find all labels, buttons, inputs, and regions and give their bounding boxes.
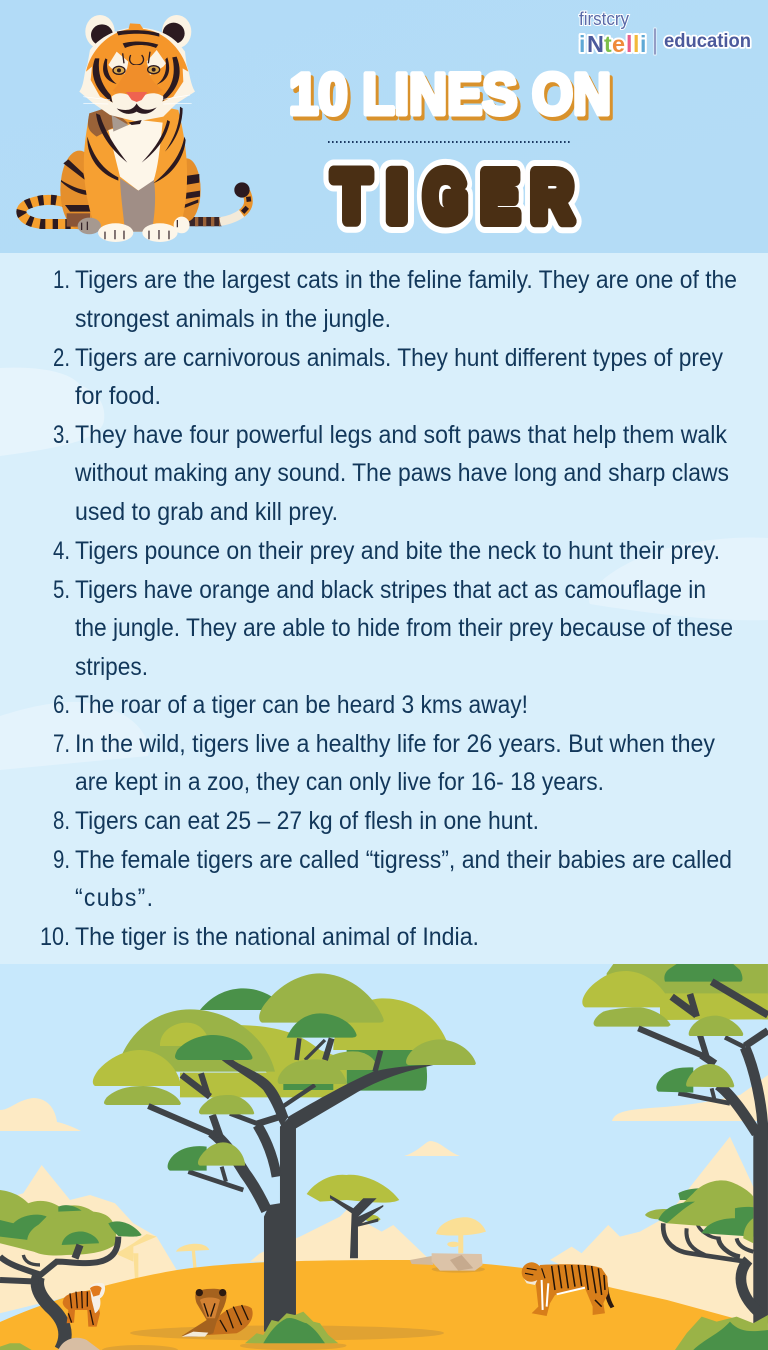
logo: intelli: l [633,31,639,57]
logo: intelli: e [612,31,625,57]
left tree foliage back [0,1190,115,1253]
title: tiger: I [387,158,407,237]
logo divider [654,28,656,55]
text: fact 1 [53,266,737,333]
text: fact 2: Tigers are carnivorous animals. They hunt different types of prey [75,344,723,372]
text: fact 7: In the wild, tigers live a healthy life for 26 years. But when they [75,730,715,758]
foliage front [278,1059,347,1084]
panel: header background [0,0,768,253]
title: tiger: T [333,158,370,237]
scene: ground shadows [102,1326,444,1350]
text: fact 2: 2. [53,344,70,372]
text: fact 3: without making any sound. The paws have long and sharp claws [74,459,729,487]
text: fact 2 [53,344,723,410]
text: fact 5: Tigers have orange and black stripes that act as camouflage in [75,576,706,604]
text: fact 10: 10. [40,923,70,951]
right tree foliage back [607,964,768,995]
text: fact 9: The female tigers are called “tigress”, and their babies are called [75,846,732,874]
logo: intelli: t [604,31,612,57]
text: fact 6: The roar of a tiger can be heard 3 kms away! [75,691,528,719]
text: fact 7: 7. [53,730,70,758]
title: tiger: R [531,158,573,237]
tiger ears [85,15,115,48]
logo: intelli: l [626,31,632,57]
text: fact 5: stripes. [75,653,148,681]
text: fact 5 [53,576,733,681]
title: 10 lines on: 10 LINES ON [292,66,614,131]
scene: distant trees [117,1217,610,1288]
text: fact 7: are kept in a zoo, they can only live for 16- 18 years. [75,768,604,796]
logo: intelli: i [640,31,646,57]
scene: ground hill [0,1260,768,1350]
logo: intelli: i [579,31,585,57]
text: fact 1: strongest animals in the jungle. [75,305,391,333]
tiger: lying down [182,1289,253,1337]
tiger muzzle [112,93,163,115]
text: fact 3 [53,421,729,526]
logo: firstcry intelli education [579,9,751,57]
scene: mountains [0,1137,768,1327]
tree: left foreground acacia [0,1190,142,1350]
text: fact 10: The tiger is the national animal of India. [75,923,479,951]
tiger left tail [21,200,83,224]
tiger eyes [113,66,125,74]
title: tiger: E [481,158,519,237]
scene: rocks [410,1253,485,1273]
branches [287,1065,433,1128]
tiger: small standing left [63,1283,105,1327]
trunk [264,1117,296,1332]
illustration: savanna scene [0,964,768,1350]
logo: intelli: N [587,31,604,57]
panel: facts background [0,253,768,964]
title: 10 lines on: 10 LINES ON [289,62,611,127]
tiger eye patches [108,50,166,75]
text: fact 3: used to grab and kill prey. [75,498,338,526]
logo: education: education [664,31,751,52]
tree: right foreground acacia [582,964,768,1350]
left tree trunk and branches [0,1237,118,1350]
text: fact 8: Tigers can eat 25 – 27 kg of flesh in one hunt. [75,807,539,835]
text: fact 5: 5. [53,576,70,604]
text: fact 1: 1. [53,266,70,294]
tree: large central acacia [93,973,476,1332]
right tree lower foliage [678,1188,700,1200]
text: fact 6: 6. [53,691,70,719]
title: tiger: G [424,158,467,237]
text: fact 4: Tigers pounce on their prey and bite the neck to hunt their prey. [75,537,720,565]
text: fact 8: 8. [53,807,70,835]
tiger paws [78,218,101,234]
illustration: sitting tiger [21,15,250,242]
text: fact 3: They have four powerful legs and soft paws that help them walk [75,421,727,449]
text: fact 9: 9. [53,846,70,874]
text: fact 9 [53,846,732,912]
tiger head [79,27,195,122]
scene: small background tree [307,1175,399,1258]
title: tiger: G [424,158,467,237]
title: tiger: I [387,158,407,237]
right tree trunk and branches [753,1132,768,1323]
tiger body [84,100,187,232]
tiger right tail [187,192,249,222]
right tree foliage front [689,1016,743,1036]
tiger: standing right [522,1262,614,1316]
logo: firstcry: firstcry [579,9,629,29]
title: tiger [333,158,573,237]
text: fact 2: for food. [75,382,161,410]
title: tiger: E [481,158,519,237]
tiger haunches [60,151,98,229]
tiger face markings [93,30,180,103]
bush: under central tree [240,1312,347,1349]
bush bottom right [675,1315,768,1350]
scene: clouds [0,1075,768,1156]
text: fact 9: “cubs”. [75,884,153,912]
tiger body stripes [87,107,186,183]
text: fact 7 [53,730,715,796]
scene: sky [0,964,768,1350]
bush bottom left [0,1343,32,1350]
text: fact 3: 3. [53,421,70,449]
logo: intelli [579,31,646,57]
foliage back [200,988,272,1010]
divider: dotted line [328,141,571,143]
title: tiger: R [531,158,573,237]
text: fact 4: 4. [53,537,70,565]
title: tiger: T [333,158,370,237]
